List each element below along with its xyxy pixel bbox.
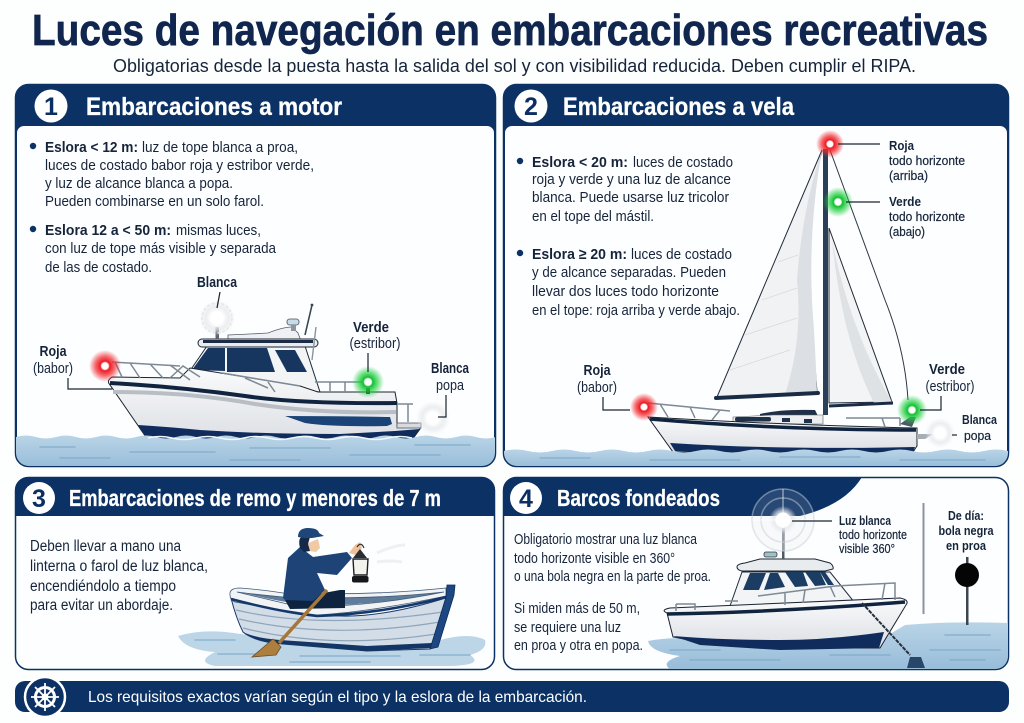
light: verde abajo bbox=[823, 187, 853, 217]
text block: eslora menor de 12 m: luz de tope blanca a proa, bbox=[142, 139, 298, 156]
text block: eslora menor de 12 m: y luz de alcance blanca a popa. bbox=[45, 175, 233, 192]
label: verde estribor bbox=[920, 362, 974, 410]
label: blanca popa: Blanca bbox=[962, 412, 998, 427]
icon: ship wheel bbox=[25, 677, 65, 717]
text block: más de 50 m: Si miden más de 50 m, bbox=[514, 601, 640, 617]
subtitle: Obligatorias desde la puesta hasta la salida del sol y con visibilidad reducida. Deben cumplir el RIPA. bbox=[113, 56, 916, 76]
panel frame bbox=[16, 84, 496, 466]
text block: eslora de 12 a 50 m: con luz de tope más visible y separada bbox=[45, 240, 277, 257]
text block: remo: linterna o farol de luz blanca, bbox=[30, 558, 208, 575]
label: verde todo horizonte: Verde bbox=[889, 194, 921, 209]
light: verde estribor bbox=[897, 395, 927, 425]
motor boat bbox=[108, 304, 421, 440]
light: blanca popa bbox=[925, 418, 955, 448]
panel frame bbox=[16, 478, 494, 670]
label: roja todo horizonte: Roja bbox=[889, 138, 915, 153]
text block: eslora menor de 20 m: blanca. Puede usarse luz tricolor bbox=[532, 189, 729, 206]
panel frame bbox=[504, 478, 1008, 670]
text block: eslora de 20 m o más: luces de costado bbox=[631, 246, 732, 263]
number badge 1: 1 bbox=[44, 93, 58, 121]
light: blanca popa bbox=[416, 401, 450, 435]
text block: eslora de 20 m o más bbox=[517, 246, 740, 319]
label: verde estribor bbox=[350, 320, 400, 372]
label: roja babor: (babor) bbox=[33, 361, 73, 377]
number badge 4 bbox=[510, 482, 542, 514]
text block: eslora de 20 m o más: Eslora ≥ 20 m: bbox=[532, 246, 627, 263]
label: roja todo horizonte: todo horizonte bbox=[889, 153, 965, 168]
light: verde estribor bbox=[352, 366, 384, 398]
text block: eslora de 12 a 50 m: de las de costado. bbox=[45, 259, 152, 276]
water: panel 2 bbox=[504, 450, 1008, 467]
text block: eslora de 20 m o más: y de alcance separadas. Pueden bbox=[532, 264, 726, 281]
light: roja babor bbox=[630, 393, 658, 421]
label: roja babor: Roja bbox=[584, 363, 611, 379]
label: verde estribor: (estribor) bbox=[350, 336, 400, 352]
rowboat bbox=[230, 528, 455, 651]
label: roja babor bbox=[33, 344, 112, 389]
text block: eslora menor de 20 m: en el tope del mástil. bbox=[532, 208, 654, 225]
panel frame bbox=[504, 84, 1008, 466]
label: roja babor: (babor) bbox=[577, 380, 617, 396]
label: blanca tope: Blanca bbox=[197, 275, 238, 291]
text block: eslora de 12 a 50 m bbox=[30, 222, 277, 276]
label: blanca popa bbox=[431, 361, 470, 417]
label: verde todo horizonte bbox=[846, 194, 965, 239]
footer note: Los requisitos exactos varían según el tipo y la eslora de la embarcación. bbox=[88, 689, 587, 706]
label: luz blanca: visible 360° bbox=[839, 541, 895, 556]
text block: eslora menor de 20 m: Eslora < 20 m: bbox=[532, 154, 628, 171]
label: verde estribor: Verde bbox=[353, 320, 389, 336]
label: verde todo horizonte: todo horizonte bbox=[889, 209, 965, 224]
panel 2 body bbox=[505, 126, 1007, 465]
text block: obligatorio: Obligatorio mostrar una luz blanca bbox=[514, 532, 698, 548]
panel: barcos fondeados bbox=[503, 477, 1008, 670]
text block: remo: para evitar un abordaje. bbox=[30, 597, 173, 614]
label: roja todo horizonte: (arriba) bbox=[889, 168, 928, 183]
heading: barcos fondeados: Barcos fondeados bbox=[557, 485, 720, 511]
panel 1 body bbox=[17, 126, 494, 465]
label: de dia bbox=[938, 508, 994, 553]
label: roja babor: Roja bbox=[40, 344, 67, 360]
number badge 2 bbox=[514, 90, 548, 122]
icon: bola negra bbox=[955, 557, 979, 625]
panel 4 header band bbox=[503, 477, 862, 516]
label: roja babor bbox=[577, 363, 630, 410]
lantern bbox=[352, 544, 405, 582]
label: de dia: en proa bbox=[946, 538, 987, 553]
label: blanca popa: popa bbox=[436, 378, 465, 394]
sailboat bbox=[648, 149, 933, 454]
light: roja arriba bbox=[816, 130, 844, 158]
panel: embarcaciones a vela bbox=[504, 84, 1008, 467]
label: verde estribor: (estribor) bbox=[926, 379, 974, 395]
heading: remo y menores de 7 m: Embarcaciones de remo y menores de 7 m bbox=[69, 485, 441, 511]
text block: eslora menor de 12 m: luces de costado babor roja y estribor verde, bbox=[45, 157, 314, 174]
light: roja babor bbox=[89, 350, 121, 382]
text block: eslora menor de 20 m: roja y verde y una luz de alcance bbox=[532, 171, 731, 188]
text block: remo: Deben llevar a mano una bbox=[30, 538, 181, 555]
text block: eslora de 12 a 50 m: mismas luces, bbox=[176, 222, 261, 239]
text block: obligatorio: todo horizonte visible en 360° bbox=[514, 551, 675, 567]
text block: más de 50 m: se requiere una luz bbox=[514, 620, 621, 636]
label: luz blanca bbox=[792, 513, 907, 556]
label: de dia: De día: bbox=[948, 508, 984, 523]
text block: eslora de 20 m o más: llevar dos luces todo horizonte bbox=[532, 283, 719, 300]
text block: eslora menor de 12 m: Eslora < 12 m: bbox=[45, 139, 138, 156]
anchored boat bbox=[664, 528, 907, 650]
label: verde estribor: Verde bbox=[929, 362, 965, 378]
panel 3 header band bbox=[15, 477, 495, 516]
panel: embarcaciones a motor bbox=[16, 84, 496, 467]
text block: eslora menor de 12 m bbox=[30, 139, 314, 210]
number badge 2: 2 bbox=[524, 93, 538, 121]
water: rowboat bbox=[178, 631, 485, 666]
label: blanca tope bbox=[197, 275, 238, 308]
number badge 3 bbox=[23, 482, 55, 514]
footer banner bbox=[15, 677, 1009, 717]
label: blanca popa: Blanca bbox=[431, 361, 470, 377]
number badge 1 bbox=[34, 90, 68, 122]
label: verde todo horizonte: (abajo) bbox=[889, 224, 925, 239]
text block: eslora de 20 m o más: en el tope: roja arriba y verde abajo. bbox=[532, 302, 740, 319]
label: luz blanca: todo horizonte bbox=[839, 527, 907, 542]
anchor chain and block bbox=[862, 603, 925, 668]
text block: eslora menor de 12 m: Pueden combinarse en un solo farol. bbox=[45, 193, 264, 210]
text block: eslora menor de 20 m: luces de costado bbox=[633, 154, 733, 171]
label: roja todo horizonte bbox=[838, 138, 965, 183]
water: panel 1 bbox=[16, 436, 496, 467]
text block: obligatorio bbox=[514, 532, 711, 585]
text block: más de 50 m bbox=[514, 601, 643, 654]
text block: eslora menor de 20 m bbox=[517, 154, 733, 225]
heading: embarcaciones a vela: Embarcaciones a vela bbox=[563, 93, 795, 121]
number badge 4: 4 bbox=[519, 485, 533, 513]
label: blanca popa: popa bbox=[964, 428, 992, 443]
oar bbox=[252, 590, 327, 657]
label: luz blanca: Luz blanca bbox=[839, 513, 892, 528]
divider bbox=[922, 503, 924, 614]
heading: embarcaciones a motor: Embarcaciones a motor bbox=[86, 93, 342, 121]
light: blanca tope bbox=[199, 300, 235, 336]
label: de dia: bola negra bbox=[938, 523, 994, 538]
text block: eslora de 12 a 50 m: Eslora 12 a < 50 m: bbox=[45, 222, 171, 239]
panel: embarcaciones de remo bbox=[15, 477, 495, 670]
text block: remo: encendiéndolo a tiempo bbox=[30, 578, 176, 595]
water: panel 4 bbox=[648, 622, 1008, 669]
number badge 3: 3 bbox=[32, 485, 46, 513]
text block: más de 50 m: en proa y otra en popa. bbox=[514, 638, 643, 654]
light: blanca todo horizonte bbox=[752, 489, 814, 551]
text block: remo bbox=[30, 538, 208, 614]
label: blanca popa bbox=[952, 412, 998, 443]
footer band bbox=[15, 681, 1009, 712]
text block: obligatorio: o una bola negra en la parte de proa. bbox=[514, 569, 711, 585]
